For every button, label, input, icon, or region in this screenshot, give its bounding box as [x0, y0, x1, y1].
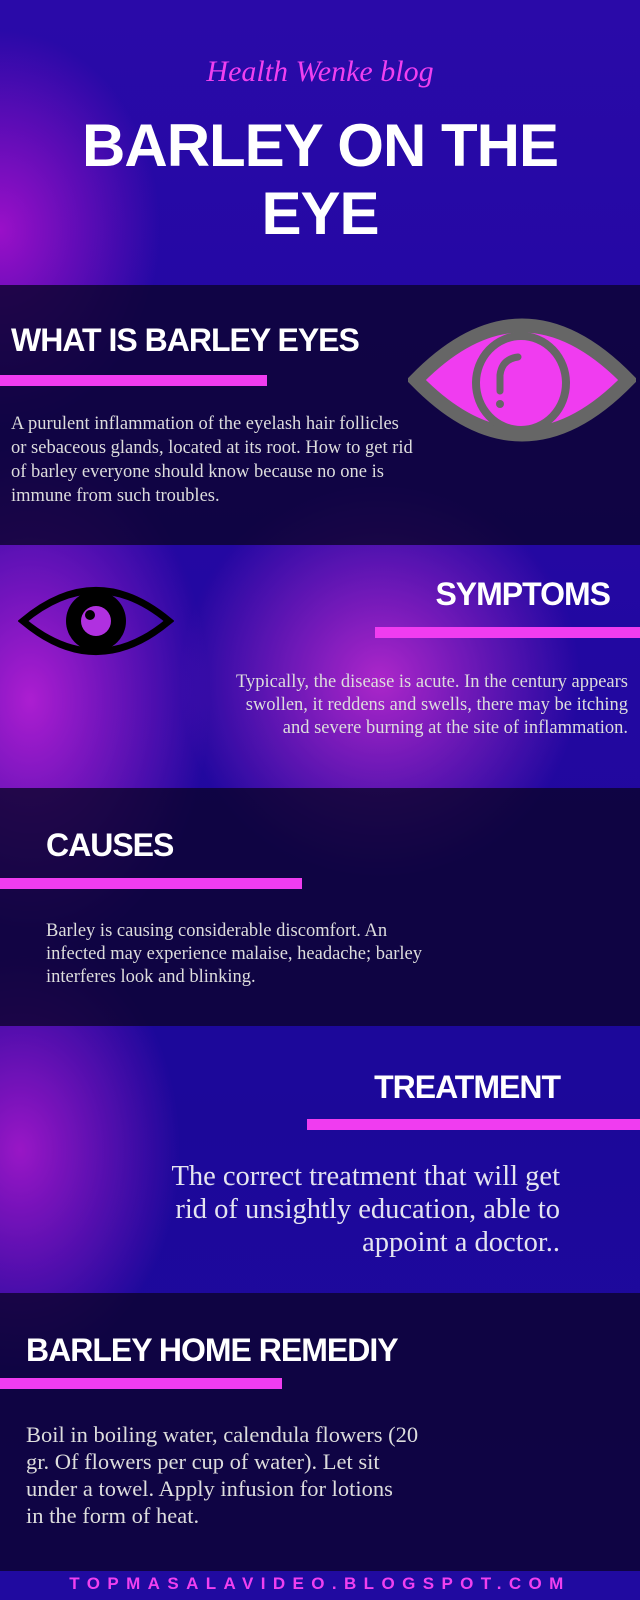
text block: and severe burning at the site of inflammation.: [283, 718, 628, 738]
text block: A purulent inflammation of the eyelash hair follicles: [11, 414, 399, 434]
icon: black eye: [18, 586, 174, 656]
panel: treatment: [0, 1026, 640, 1293]
text block: of barley everyone should know because no one is: [11, 462, 384, 482]
text block: gr. Of flowers per cup of water). Let sit: [26, 1449, 380, 1474]
text block: infected may experience malaise, headache; barley: [46, 944, 422, 964]
accent bar: [375, 627, 640, 638]
text block: [11, 414, 413, 506]
text block: [171, 1161, 560, 1258]
text block: The correct treatment that will get: [171, 1161, 560, 1192]
text block: [236, 672, 628, 738]
panel: causes: [0, 788, 640, 1026]
text block: appoint a doctor..: [362, 1227, 560, 1258]
text block: interferes look and blinking.: [46, 967, 256, 987]
heading: WHAT IS BARLEY EYES: [11, 322, 359, 358]
icon: pink eye: [408, 318, 636, 442]
heading: BARLEY HOME REMEDIY: [26, 1332, 398, 1368]
text block: immune from such troubles.: [11, 486, 220, 506]
text block: [26, 1422, 418, 1528]
text block: Typically, the disease is acute. In the century appears: [236, 672, 628, 692]
text block: or sebaceous glands, located at its root. How to get rid: [11, 438, 413, 458]
text block: rid of unsightly education, able to: [175, 1194, 560, 1225]
accent bar: [307, 1119, 640, 1130]
text block: Boil in boiling water, calendula flowers (20: [26, 1422, 418, 1447]
heading: TREATMENT: [374, 1069, 560, 1105]
title: BARLEY ON THE: [82, 112, 558, 179]
panel: symptoms: [0, 545, 640, 788]
panel: what is barley eyes: [0, 285, 640, 545]
blog name: Health Wenke blog: [206, 55, 434, 88]
title: [82, 112, 558, 247]
footer url: TOPMASALAVIDEO.BLOGSPOT.COM: [69, 1574, 571, 1593]
text block: swollen, it reddens and swells, there may be itching: [246, 695, 628, 715]
accent bar: [0, 878, 302, 889]
text block: Barley is causing considerable discomfort. An: [46, 921, 387, 941]
accent bar: [0, 375, 267, 386]
accent bar: [0, 1378, 282, 1389]
text block: in the form of heat.: [26, 1503, 199, 1528]
text block: under a towel. Apply infusion for lotions: [26, 1476, 393, 1501]
heading: CAUSES: [46, 827, 173, 863]
panel: home remedy: [0, 1293, 640, 1571]
heading: SYMPTOMS: [435, 576, 610, 612]
title: EYE: [261, 180, 379, 247]
text block: [46, 921, 422, 987]
